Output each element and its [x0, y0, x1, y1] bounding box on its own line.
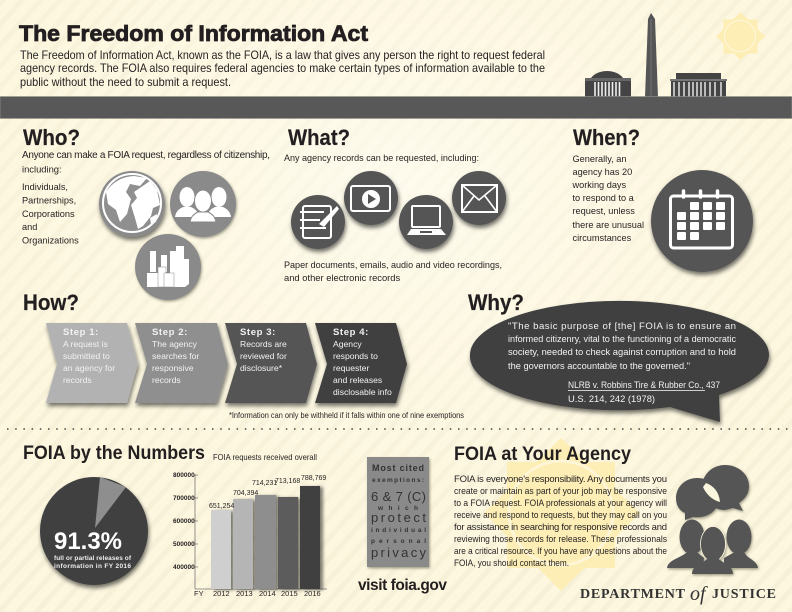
bar chart — [173, 452, 327, 598]
step 4: responds to — [333, 351, 378, 361]
step 3 — [225, 323, 317, 403]
heading: why: Why? — [468, 290, 524, 315]
y axis labels: 600000 — [173, 518, 195, 525]
pie chart: 91.3% — [54, 528, 122, 555]
panel: most cited exemptions: which — [377, 505, 418, 512]
icon: globe — [99, 171, 165, 237]
when text — [572, 154, 644, 243]
step 1: an agency for — [63, 363, 115, 373]
panel: most cited exemptions: protect — [371, 510, 426, 525]
step 1: A request is — [63, 339, 108, 349]
step 3: disclosure* — [240, 363, 283, 373]
y axis labels: 400000 — [173, 564, 195, 571]
year labels — [194, 589, 321, 598]
step 1: submitted to — [63, 351, 110, 361]
visit link: visit foia.gov — [358, 577, 447, 594]
panel: most cited exemptions: Most cited — [372, 463, 424, 473]
step 2: The agency — [152, 339, 198, 349]
icon: video — [344, 171, 398, 225]
bars — [211, 486, 320, 589]
quote text: society, needed to check against corruption and to hold — [508, 347, 736, 358]
who text: and — [22, 222, 37, 232]
heading: who: Who? — [23, 125, 80, 150]
logo: Department of Justice: JUSTICE — [712, 587, 776, 602]
value labels: 713,168 — [275, 478, 300, 485]
intro text — [20, 48, 545, 89]
step 2: Step 2: — [152, 327, 188, 338]
panel: how — [23, 290, 464, 420]
step 4: Agency — [333, 339, 362, 349]
value labels — [209, 475, 326, 510]
value labels: 714,231 — [252, 480, 277, 487]
what intro text: Any agency records can be requested, including: — [284, 152, 479, 163]
icon: Lincoln Memorial — [670, 73, 727, 97]
step 2: searches for — [152, 351, 199, 361]
panel: FOIA by the numbers — [23, 443, 447, 598]
step 1: records — [63, 375, 92, 385]
footnote: *Information can only be withheld if it falls within one of nine exemptions — [229, 411, 464, 420]
step 2: responsive — [152, 363, 194, 373]
year labels: 2016 — [304, 589, 321, 598]
step 3: reviewed for — [240, 351, 287, 361]
skyline bar — [0, 96, 792, 118]
pie chart: full or partial releases of — [54, 555, 132, 562]
panel: most cited exemptions: exemptions: — [372, 477, 424, 484]
y axis labels — [173, 472, 195, 571]
agency text: to a FOIA request. FOIA professionals at your agency will — [454, 498, 667, 509]
logo: Department of Justice: of — [690, 583, 708, 605]
quote text — [508, 321, 736, 372]
icon: envelope — [452, 171, 506, 225]
panel: most cited exemptions: personal — [371, 538, 426, 545]
step 1: Step 1: — [63, 327, 99, 338]
dotted divider — [7, 428, 792, 430]
icon: Washington Monument — [645, 13, 658, 97]
agency text: create or maintain as part of your job may be responsive — [454, 486, 667, 497]
who text: including: — [22, 164, 62, 174]
step 4: and releases — [333, 375, 382, 385]
agency text: FOIA is everyone's responsibility. Any documents you — [454, 474, 667, 485]
icon: speech bubbles and people — [667, 465, 758, 574]
year labels: FY — [194, 589, 204, 598]
agency text: FOIA, you should contact them. — [454, 558, 569, 569]
who text: Individuals, — [22, 182, 68, 192]
quote text: informed citizenry, vital to the functioning of a democratic — [508, 334, 736, 345]
when text: request, unless — [572, 206, 635, 216]
step 2 — [135, 323, 228, 403]
panel: who — [22, 125, 270, 300]
icon: sun — [716, 12, 765, 60]
y axis labels: 500000 — [173, 541, 195, 548]
year labels: 2014 — [259, 589, 276, 598]
logo: Department of Justice — [580, 583, 776, 605]
year labels: 2013 — [236, 589, 253, 598]
step 4 — [315, 323, 407, 403]
pie chart — [40, 477, 148, 585]
heading: when: When? — [573, 125, 640, 150]
heading: numbers: FOIA by the Numbers — [23, 443, 205, 464]
step 1 — [46, 323, 138, 403]
agency text — [454, 474, 667, 569]
what caption: and other electronic records — [284, 272, 401, 283]
panel: FOIA at your agency — [454, 438, 776, 605]
y axis labels: 800000 — [173, 472, 195, 479]
when text: to respond to a — [572, 193, 635, 203]
intro text: The Freedom of Information Act, known as the FOIA, is a law that gives any person the right to request federal — [20, 48, 545, 62]
chart title: FOIA requests received overall — [213, 452, 317, 462]
agency text: are a critical resource. If you have any questions about the — [454, 546, 667, 557]
quote text: "The basic purpose of [the] FOIA is to ensure an — [508, 321, 736, 332]
icon: calendar — [651, 170, 753, 272]
citation: NLRB v. Robbins Tire & Rubber Co., 437 — [568, 379, 720, 390]
panel: when — [572, 125, 753, 272]
agency text: for assistance in searching for responsive records and — [454, 522, 667, 533]
intro text: public without the need to submit a request. — [20, 75, 231, 89]
quote text: the governors accountable to the governed." — [508, 361, 690, 372]
year labels: 2012 — [213, 589, 230, 598]
step 4: disclosable info — [333, 387, 392, 397]
citation: U.S. 214, 242 (1978) — [568, 393, 655, 404]
step 3: Step 3: — [240, 327, 276, 338]
who text — [22, 150, 270, 246]
logo: Department of Justice: DEPARTMENT — [580, 587, 686, 602]
when text: working days — [572, 180, 627, 190]
when text: there are unusual — [572, 220, 644, 230]
step 4: requester — [333, 363, 369, 373]
step 2: records — [152, 375, 181, 385]
when text: Generally, an — [572, 154, 626, 164]
when text: agency has 20 — [572, 167, 632, 177]
who text: Anyone can make a FOIA request, regardless of citizenship, — [22, 150, 270, 161]
panel: most cited exemptions: 6 & 7 (C) — [371, 489, 426, 504]
value labels: 651,254 — [209, 503, 234, 510]
value labels: 788,769 — [301, 475, 326, 482]
year labels: 2015 — [281, 589, 298, 598]
agency text: receive and respond to requests, but they may call on you — [454, 510, 667, 521]
panel: why — [468, 290, 769, 422]
intro text: agency records. The FOIA also requires federal agencies to make certain types of information available to the — [20, 61, 545, 75]
icon: Jefferson Memorial — [585, 71, 631, 97]
heading: what: What? — [288, 125, 350, 150]
what caption: Paper documents, emails, audio and video recordings, — [284, 259, 502, 270]
step 3: Records are — [240, 339, 287, 349]
citation — [568, 379, 720, 404]
when text: circumstances — [572, 233, 632, 243]
what caption — [284, 259, 502, 283]
icon: people — [170, 171, 236, 237]
who text: Partnerships, — [22, 196, 76, 206]
panel: most cited exemptions — [367, 457, 429, 567]
title: The Freedom of Information Act — [19, 21, 369, 46]
speech bubble — [470, 301, 769, 422]
value labels: 704,394 — [233, 490, 258, 497]
who text: Organizations — [22, 236, 79, 246]
panel: what — [284, 125, 506, 283]
icon: laptop — [399, 195, 453, 249]
pie chart: information in FY 2016 — [54, 563, 131, 570]
y axis labels: 700000 — [173, 495, 195, 502]
step 4: Step 4: — [333, 327, 369, 338]
agency text: reviewing those records for release. These professionals — [454, 534, 667, 545]
heading: agency: FOIA at Your Agency — [454, 444, 631, 465]
axes — [195, 475, 327, 589]
who text: Corporations — [22, 209, 75, 219]
heading: how: How? — [23, 290, 79, 315]
panel: most cited exemptions: individual — [371, 527, 426, 534]
icon: factory — [135, 234, 201, 300]
icon: document — [291, 195, 345, 249]
background sun — [484, 438, 640, 591]
panel: most cited exemptions: privacy — [371, 545, 426, 560]
